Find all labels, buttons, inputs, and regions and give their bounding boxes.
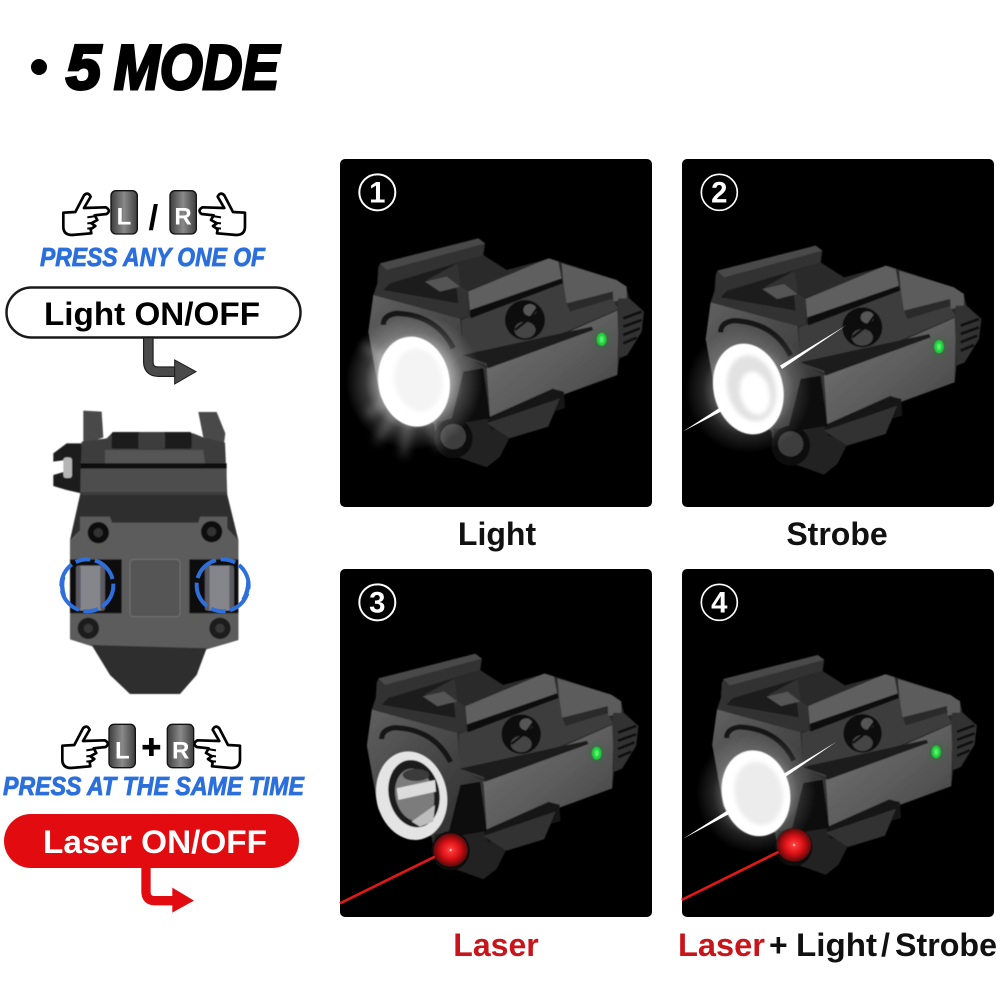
label: laser: Laser <box>453 927 539 963</box>
icon: hands pressing L and R <box>62 724 240 768</box>
icon: number 4: 4 <box>711 587 728 620</box>
title <box>31 33 281 103</box>
button: laser on off: Laser ON/OFF <box>43 824 267 860</box>
icon: number 3 <box>359 584 395 620</box>
icon: number 1: 1 <box>369 177 385 210</box>
label: light: Light <box>458 516 536 552</box>
device: rear view with side buttons <box>53 411 256 694</box>
icon: hands pressing L or R: R <box>174 204 192 231</box>
icon: hands pressing L and R: L <box>115 737 130 764</box>
icon: hands pressing L or R: / <box>148 198 158 237</box>
label: laser plus light strobe: Light <box>796 927 877 963</box>
icon: hands pressing L and R: + <box>142 729 161 766</box>
panel: press at the same time instructions <box>3 724 305 913</box>
button: light on off: Light ON/OFF <box>44 296 260 332</box>
icon: hands pressing L or R: L <box>117 204 131 231</box>
title: MODE <box>114 33 281 103</box>
icon: number 4 <box>701 584 737 620</box>
icon: number 2: 2 <box>711 177 727 210</box>
panel: mode 4 laser light strobe <box>682 569 994 917</box>
label: strobe: Strobe <box>786 516 888 552</box>
arrow: light <box>148 338 196 384</box>
icon: hands pressing L and R: R <box>172 737 189 764</box>
lit lens with streak <box>683 733 837 853</box>
icon: number 2 <box>701 174 737 210</box>
unlit lens with ring <box>368 745 456 847</box>
label: laser plus light strobe <box>678 927 997 963</box>
title: 5 <box>66 33 102 103</box>
panel: mode 2 strobe <box>682 159 994 507</box>
icon: number 3: 3 <box>369 587 385 620</box>
panel: mode 1 light <box>340 159 652 507</box>
label: laser plus light strobe: + <box>769 927 788 963</box>
label: laser plus light strobe: Laser <box>678 927 765 963</box>
heading: press any one of: PRESS ANY ONE OF <box>40 242 266 272</box>
laser beam <box>340 833 468 903</box>
label: laser plus light strobe: / <box>881 927 890 963</box>
lit lens with streak <box>683 325 847 453</box>
lit lens <box>346 313 482 455</box>
icon: hands pressing L or R <box>63 191 245 237</box>
label: laser plus light strobe: Strobe <box>895 927 997 963</box>
icon: number 1 <box>359 174 395 210</box>
arrow: laser <box>146 867 194 913</box>
icon: blue dashed circles on buttons <box>61 552 256 619</box>
button: laser on off <box>4 814 299 868</box>
panel: press any one instructions <box>6 191 300 384</box>
laser beam <box>682 828 811 900</box>
panel: mode 3 laser <box>340 569 652 917</box>
button: light on off <box>6 288 300 338</box>
heading: press at the same time: PRESS AT THE SAME TIME <box>3 771 305 801</box>
